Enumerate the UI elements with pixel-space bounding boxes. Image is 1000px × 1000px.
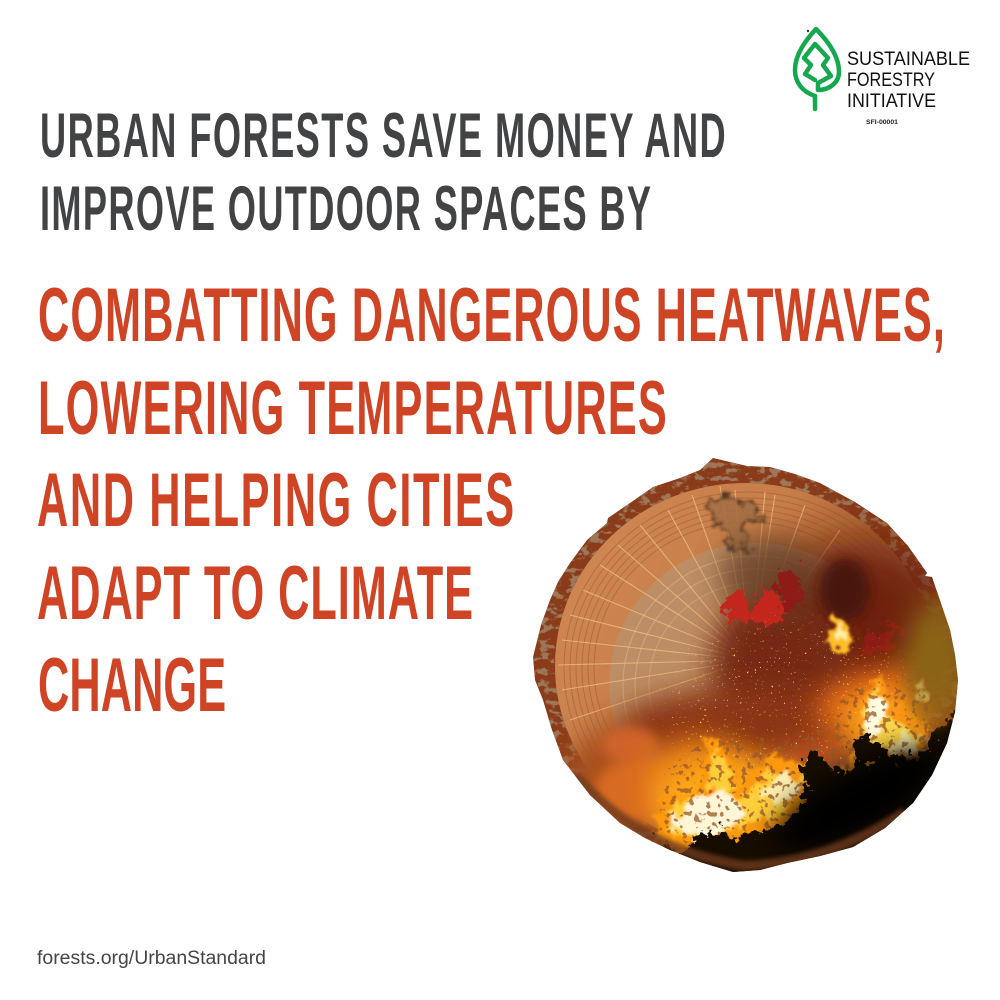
heading: red message: LOWERING TEMPERATURES xyxy=(38,366,667,451)
flames xyxy=(655,612,932,855)
inner light wood xyxy=(609,543,849,791)
orange clouds of fire xyxy=(602,727,658,763)
footer url: forests.org/UrbanStandard xyxy=(37,948,266,969)
growth rings xyxy=(564,492,864,748)
logo wordmark: INITIATIVE xyxy=(847,90,936,112)
logo: Sustainable Forestry Initiative xyxy=(795,29,970,126)
heading: red message: CHANGE xyxy=(38,643,226,728)
heading: red message: ADAPT TO CLIMATE xyxy=(37,551,473,636)
logo wordmark: SUSTAINABLE xyxy=(847,48,970,70)
red foliage xyxy=(725,565,905,655)
icon: registered mark xyxy=(807,30,809,32)
wood xyxy=(555,483,911,829)
logo wordmark: FORESTRY xyxy=(847,69,935,91)
lower rim bark xyxy=(575,775,905,866)
heading: red message: COMBATTING DANGEROUS HEATWAVES, xyxy=(38,273,945,358)
icon: green leaf with tree xyxy=(795,29,839,109)
dark tree silhouettes xyxy=(650,710,956,872)
heading: grey intro xyxy=(40,99,726,244)
foliage texture over flames xyxy=(656,673,945,852)
image: wildfire inside a tree cross-section xyxy=(533,458,958,872)
distant glowing tree at right xyxy=(905,590,958,730)
bark xyxy=(525,450,965,880)
sparks xyxy=(645,607,930,786)
logo wordmark xyxy=(847,48,970,112)
flame glow xyxy=(652,758,808,842)
logo certificate number: SFI-00001 xyxy=(866,119,898,126)
heading: red message xyxy=(37,273,945,728)
knot in wood xyxy=(708,497,765,547)
medullary rays xyxy=(558,486,840,720)
dark smoke and shade xyxy=(770,540,950,710)
heading: grey intro: URBAN FORESTS SAVE MONEY AND xyxy=(40,99,726,171)
heading: red message: AND HELPING CITIES xyxy=(37,458,514,543)
heading: grey intro: IMPROVE OUTDOOR SPACES BY xyxy=(40,172,651,244)
